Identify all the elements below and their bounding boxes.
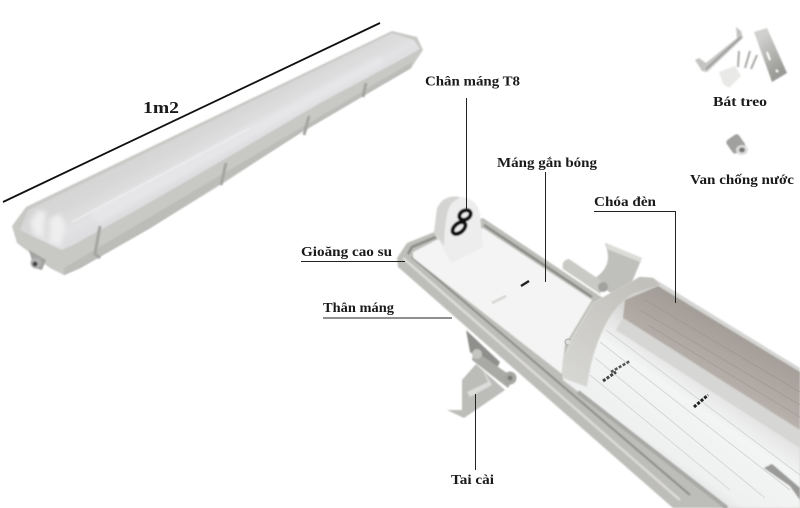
cover base	[563, 277, 800, 508]
label: body: Thân máng	[323, 301, 394, 316]
tube end inside cover	[764, 464, 800, 500]
cover lower edge	[578, 392, 727, 508]
upper rail inner edge	[408, 225, 592, 297]
label: bracket: Bát treo	[713, 95, 767, 110]
accessory: mounting bracket set	[695, 27, 787, 88]
label: diffuser	[594, 195, 676, 303]
mounting plate	[754, 28, 787, 82]
bracket arm	[695, 27, 743, 72]
lower latch	[447, 330, 516, 418]
cover markings	[603, 361, 708, 407]
lamp holder	[434, 196, 483, 263]
cover upper band	[623, 286, 800, 430]
label: lamp holder: Chân máng T8	[425, 74, 520, 90]
label: tube tray	[497, 156, 597, 282]
lower rail shading	[64, 62, 412, 275]
label: body	[323, 301, 452, 318]
dimension line	[3, 23, 380, 202]
rail highlight	[403, 258, 680, 500]
label: valve: Van chống nước	[690, 173, 794, 188]
upper latch	[563, 243, 642, 296]
translucent cover	[20, 33, 420, 250]
accessory: waterproof valve	[725, 133, 748, 155]
cable gland	[29, 250, 46, 270]
label: latch: Tai cài	[451, 473, 494, 488]
dimension label: 1m2	[143, 98, 179, 117]
tray hole	[565, 339, 571, 345]
bracket arm edge	[706, 37, 741, 69]
cover grey transition band	[616, 318, 800, 448]
panel: opened fixture photo	[397, 196, 800, 508]
fixture body	[12, 31, 423, 275]
white tray	[413, 228, 592, 374]
cover end highlight	[30, 210, 66, 246]
tray mark	[492, 296, 506, 303]
cover end cap	[563, 277, 660, 387]
label: tube tray: Máng gắn bóng	[497, 156, 597, 171]
cover ribs	[640, 300, 800, 417]
plugs	[719, 66, 741, 88]
panel: assembled fixture photo	[12, 31, 423, 275]
cover ridge	[72, 128, 250, 222]
screws	[738, 51, 757, 69]
cover centre highlight	[90, 56, 386, 224]
label: diffuser: Chóa đèn	[594, 195, 656, 210]
label: rubber gasket: Gioăng cao su	[301, 245, 392, 260]
body frame	[397, 218, 800, 508]
rail shadow	[412, 257, 690, 495]
cover light ribs	[590, 330, 800, 498]
clips	[95, 83, 366, 258]
plate holes	[767, 52, 778, 72]
tray slot	[521, 281, 529, 286]
label: lamp holder	[425, 74, 520, 210]
label: latch	[451, 394, 494, 488]
